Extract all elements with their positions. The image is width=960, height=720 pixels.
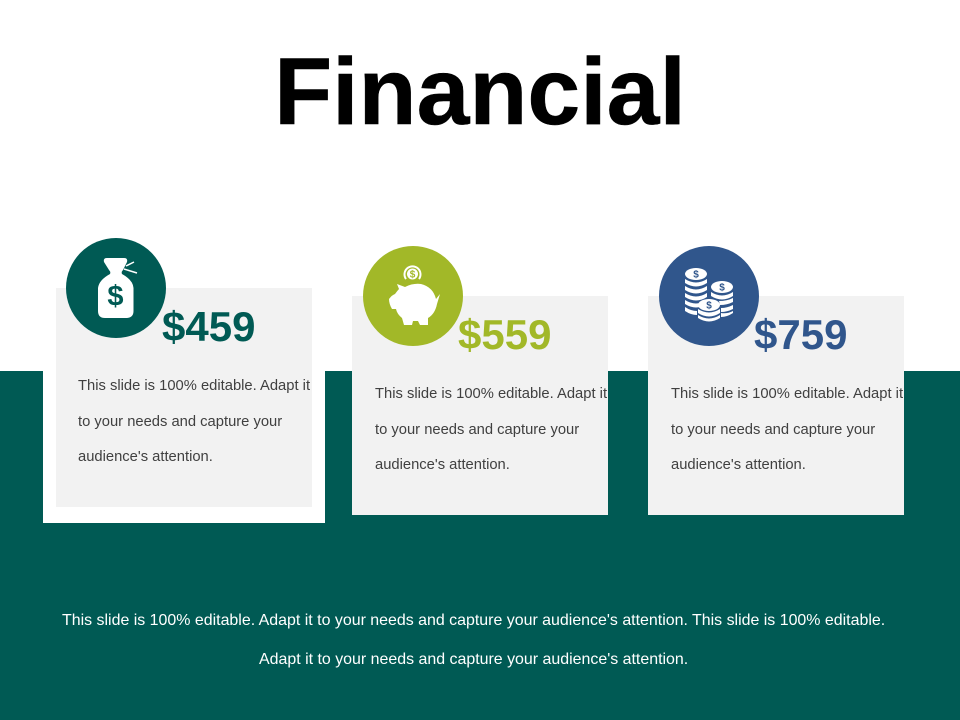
card 2 text [375, 386, 607, 473]
card 1 text: to your needs and capture your [78, 414, 282, 430]
panel: card 1 highlight frame [43, 371, 325, 523]
card 2 text: This slide is 100% editable. Adapt it [375, 386, 607, 402]
icon: coin stacks: $ [693, 270, 699, 280]
card 1 text [78, 378, 310, 465]
bottom text block: This slide is 100% editable. Adapt it to your needs and capture your audience's attention. This slide is 100% editable. [62, 612, 885, 629]
panel: card 3 [648, 296, 904, 515]
icon: piggy bank: $ [410, 270, 416, 280]
panel: card 1 [56, 288, 312, 507]
icon: money bag [66, 238, 166, 338]
bottom text block [62, 612, 885, 668]
icon: coin stacks: $ [719, 282, 725, 294]
icon: coin stacks: $ [706, 300, 712, 312]
card 3 price: $759 [754, 311, 847, 358]
icon: money bag: $ [107, 280, 124, 312]
card 2 text: to your needs and capture your [375, 422, 579, 438]
icon: coin stacks [659, 246, 759, 346]
title: Financial [274, 39, 686, 145]
card 2 text: audience's attention. [375, 457, 510, 473]
green background band [0, 371, 960, 720]
bottom text block: Adapt it to your needs and capture your audience's attention. [259, 651, 688, 668]
panel: card 2 [352, 296, 608, 515]
card 3 text: This slide is 100% editable. Adapt it [671, 386, 903, 402]
card 1 text: audience's attention. [78, 449, 213, 465]
card 2 price: $559 [458, 311, 551, 358]
card 3 text: audience's attention. [671, 457, 806, 473]
card 1 text: This slide is 100% editable. Adapt it [78, 378, 310, 394]
card 3 text: to your needs and capture your [671, 422, 875, 438]
icon: piggy bank [363, 246, 463, 346]
card 3 text [671, 386, 903, 473]
card 1 price: $459 [162, 303, 255, 350]
